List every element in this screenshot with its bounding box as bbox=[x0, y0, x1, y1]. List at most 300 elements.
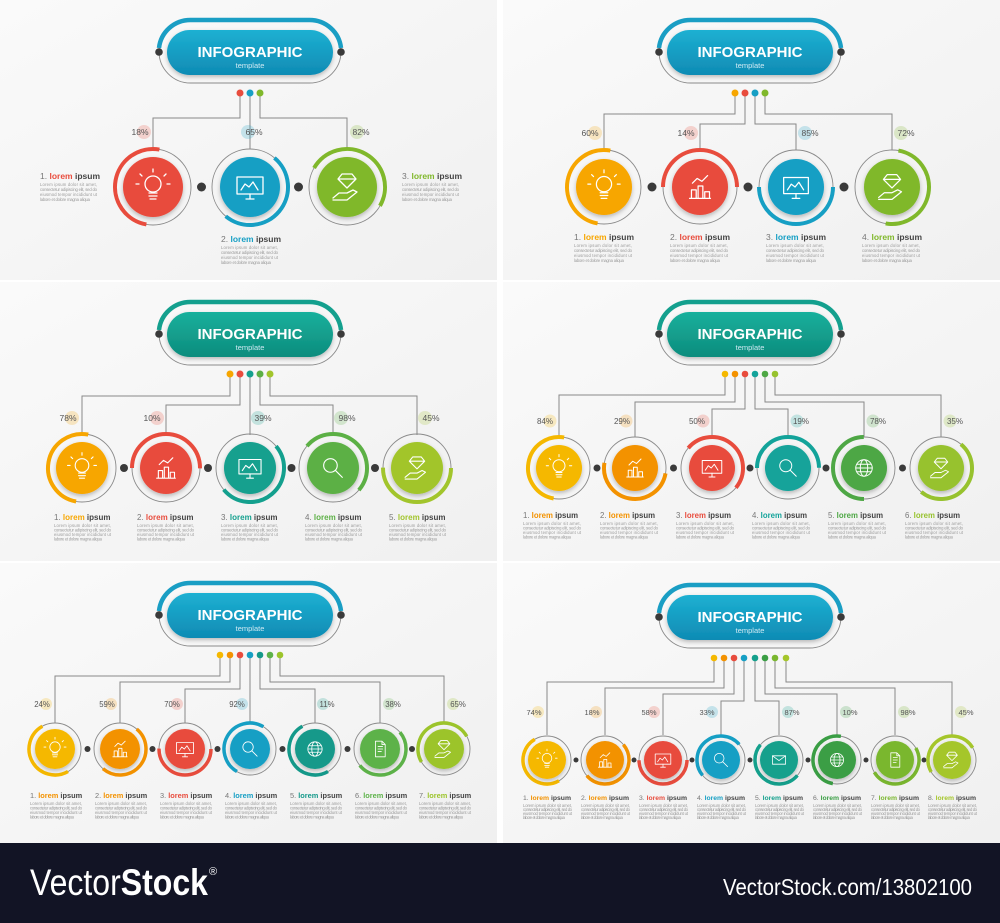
step 4 bbox=[214, 698, 286, 820]
percent: 65% bbox=[245, 127, 263, 137]
label bbox=[290, 791, 343, 820]
percent: 29% bbox=[614, 417, 630, 426]
label: 6. lorem ipsum bbox=[905, 511, 960, 520]
icon: diamond bbox=[879, 175, 902, 199]
label: Lorem ipsum dolor sit amet, bbox=[54, 523, 111, 528]
label: consectetur adipiscing elit, sed do bbox=[30, 806, 83, 810]
icon: monitor bbox=[177, 742, 193, 757]
step 2 bbox=[196, 125, 304, 265]
label: labore et dolore magna aliqua bbox=[30, 814, 75, 820]
step 3 bbox=[202, 411, 298, 542]
label: labore et dolore magna aliqua bbox=[221, 260, 272, 265]
label: eiusmod tempor incididunt ut bbox=[871, 811, 921, 816]
label: labore et dolore magna aliqua bbox=[670, 258, 721, 263]
footer bar bbox=[0, 843, 1000, 923]
label: consectetur adipiscing elit, sed do bbox=[752, 526, 811, 530]
percent: 50% bbox=[689, 417, 705, 426]
step 3 bbox=[668, 414, 756, 540]
percent: 38% bbox=[385, 700, 401, 709]
label: eiusmod tempor incididunt ut bbox=[639, 811, 689, 816]
icon: monitor bbox=[702, 460, 722, 477]
label: 3. lorem ipsum bbox=[766, 232, 826, 242]
icon: magnifier bbox=[243, 742, 257, 756]
icon: monitor bbox=[784, 178, 808, 198]
label bbox=[355, 791, 408, 820]
label: Lorem ipsum dolor sit amet, bbox=[290, 801, 342, 806]
label: eiusmod tempor incididunt ut bbox=[160, 810, 213, 815]
label: eiusmod tempor incididunt ut bbox=[419, 810, 472, 815]
label: labore et dolore magna aliqua bbox=[755, 815, 798, 820]
percent: 98% bbox=[900, 708, 916, 717]
label bbox=[389, 513, 447, 542]
label: labore et dolore magna aliqua bbox=[574, 258, 625, 263]
label: labore et dolore magna aliqua bbox=[389, 536, 438, 542]
label: consectetur adipiscing elit, sed do bbox=[355, 806, 408, 810]
percent: 10% bbox=[842, 708, 858, 717]
icon: globe bbox=[856, 460, 872, 476]
label: Lorem ipsum dolor sit amet, bbox=[40, 182, 97, 187]
header: INFOGRAPHIC bbox=[198, 44, 303, 61]
label: labore et dolore magna aliqua bbox=[290, 814, 335, 820]
step 3 bbox=[639, 706, 689, 820]
label: Lorem ipsum dolor sit amet, bbox=[766, 243, 824, 248]
label: Lorem ipsum dolor sit amet, bbox=[755, 803, 804, 808]
label bbox=[639, 795, 689, 820]
label: Lorem ipsum dolor sit amet, bbox=[160, 801, 212, 806]
label: labore et dolore magna aliqua bbox=[766, 258, 817, 263]
label: eiusmod tempor incididunt ut bbox=[697, 811, 747, 816]
label: Lorem ipsum dolor sit amet, bbox=[523, 803, 572, 808]
label: eiusmod tempor incididunt ut bbox=[290, 810, 343, 815]
label: Lorem ipsum dolor sit amet, bbox=[419, 801, 471, 806]
label: labore et dolore magna aliqua bbox=[697, 815, 740, 820]
step 4 bbox=[849, 126, 935, 263]
label: labore et dolore magna aliqua bbox=[40, 197, 91, 202]
label: eiusmod tempor incididunt ut bbox=[30, 810, 83, 815]
step 3 bbox=[159, 698, 213, 820]
label: eiusmod tempor incididunt ut bbox=[402, 192, 460, 197]
label: eiusmod tempor incididunt ut bbox=[828, 530, 887, 535]
icon: monitor bbox=[239, 460, 261, 478]
step 4 bbox=[752, 414, 819, 540]
panel: 3 steps bbox=[0, 0, 497, 280]
icon: magnifier bbox=[324, 459, 342, 477]
label: eiusmod tempor incididunt ut bbox=[752, 530, 811, 535]
label: eiusmod tempor incididunt ut bbox=[766, 253, 825, 258]
header: template bbox=[236, 343, 264, 352]
label: consectetur adipiscing elit, sed do bbox=[766, 248, 825, 253]
connectors bbox=[82, 370, 417, 472]
percent: 70% bbox=[164, 700, 180, 709]
step 2 bbox=[599, 414, 671, 540]
label bbox=[697, 795, 747, 820]
label: labore et dolore magna aliqua bbox=[523, 534, 572, 540]
header: INFOGRAPHIC bbox=[698, 44, 803, 61]
label bbox=[600, 511, 659, 540]
step 1 bbox=[43, 411, 121, 542]
label: eiusmod tempor incididunt ut bbox=[523, 811, 573, 816]
label: 4. lorem ipsum bbox=[305, 513, 361, 522]
icon: bulb bbox=[68, 453, 96, 478]
percent: 60% bbox=[581, 128, 599, 138]
label: 4. lorem ipsum bbox=[225, 791, 278, 800]
connectors bbox=[153, 90, 347, 192]
label bbox=[30, 791, 83, 820]
label: Lorem ipsum dolor sit amet, bbox=[862, 243, 920, 248]
percent: 82% bbox=[352, 127, 370, 137]
icon: chart bbox=[598, 753, 612, 767]
label: labore et dolore magna aliqua bbox=[928, 815, 971, 820]
header bbox=[655, 302, 845, 365]
label: consectetur adipiscing elit, sed do bbox=[523, 807, 573, 812]
label: 7. lorem ipsum bbox=[419, 791, 472, 800]
percent: 98% bbox=[338, 413, 356, 423]
label: eiusmod tempor incididunt ut bbox=[670, 253, 729, 258]
label: eiusmod tempor incididunt ut bbox=[225, 810, 278, 815]
label bbox=[871, 795, 921, 820]
percent bbox=[131, 125, 151, 139]
percent: 10% bbox=[143, 413, 161, 423]
label: eiusmod tempor incididunt ut bbox=[40, 192, 98, 197]
label: Lorem ipsum dolor sit amet, bbox=[221, 245, 278, 250]
header: template bbox=[236, 61, 264, 70]
label: labore et dolore magna aliqua bbox=[871, 815, 914, 820]
step 1 bbox=[523, 414, 595, 540]
step 2 bbox=[663, 126, 737, 263]
label: 7. lorem ipsum bbox=[871, 795, 919, 802]
icon: magnifier bbox=[780, 460, 796, 476]
label: 3. lorem ipsum bbox=[160, 791, 213, 800]
label: eiusmod tempor incididunt ut bbox=[523, 530, 582, 535]
label: 3. lorem ipsum bbox=[676, 511, 731, 520]
label: labore et dolore magna aliqua bbox=[752, 534, 801, 540]
header: INFOGRAPHIC bbox=[198, 326, 303, 343]
connectors bbox=[55, 652, 444, 752]
label: 2. lorem ipsum bbox=[581, 795, 629, 802]
label: eiusmod tempor incididunt ut bbox=[676, 530, 735, 535]
percent: 78% bbox=[59, 413, 77, 423]
percent: 18% bbox=[131, 127, 149, 137]
label: consectetur adipiscing elit, sed do bbox=[221, 250, 279, 255]
percent: 58% bbox=[641, 708, 657, 717]
label: eiusmod tempor incididunt ut bbox=[755, 811, 805, 816]
header bbox=[655, 585, 845, 648]
step 1 bbox=[19, 698, 91, 820]
icon: chart bbox=[157, 458, 175, 478]
label: consectetur adipiscing elit, sed do bbox=[54, 528, 112, 532]
step 5 bbox=[828, 414, 895, 540]
label: labore et dolore magna aliqua bbox=[137, 536, 186, 542]
label: 2. lorem ipsum bbox=[670, 232, 730, 242]
label bbox=[419, 791, 472, 820]
label: Lorem ipsum dolor sit amet, bbox=[225, 801, 277, 806]
percent: 19% bbox=[793, 417, 809, 426]
label: 4. lorem ipsum bbox=[862, 232, 922, 242]
icon: bulb bbox=[588, 170, 620, 198]
label: labore et dolore magna aliqua bbox=[160, 814, 205, 820]
header: INFOGRAPHIC bbox=[198, 607, 303, 624]
step 1 bbox=[561, 126, 647, 263]
label: 2. lorem ipsum bbox=[600, 511, 655, 520]
label: 5. lorem ipsum bbox=[290, 791, 343, 800]
label: Lorem ipsum dolor sit amet, bbox=[581, 803, 630, 808]
label: consectetur adipiscing elit, sed do bbox=[389, 528, 447, 532]
header bbox=[155, 302, 345, 365]
label: 1. lorem ipsum bbox=[30, 791, 83, 800]
step 3 bbox=[759, 126, 833, 263]
icon: document bbox=[891, 753, 900, 767]
step 6 bbox=[897, 414, 985, 540]
label: consectetur adipiscing elit, sed do bbox=[95, 806, 148, 810]
label: Lorem ipsum dolor sit amet, bbox=[523, 521, 581, 526]
label: Lorem ipsum dolor sit amet, bbox=[752, 521, 810, 526]
label bbox=[137, 513, 195, 542]
label bbox=[928, 795, 978, 820]
icon: mail bbox=[772, 756, 786, 764]
label: eiusmod tempor incididunt ut bbox=[95, 810, 148, 815]
percent: 45% bbox=[422, 413, 440, 423]
label: 6. lorem ipsum bbox=[813, 795, 861, 802]
label: consectetur adipiscing elit, sed do bbox=[137, 528, 195, 532]
label: consectetur adipiscing elit, sed do bbox=[402, 187, 460, 192]
panel: 5 steps bbox=[0, 282, 497, 561]
panel: 7 steps bbox=[0, 563, 497, 843]
label: labore et dolore magna aliqua bbox=[639, 815, 682, 820]
percent: 33% bbox=[699, 708, 715, 717]
label: eiusmod tempor incididunt ut bbox=[305, 532, 363, 537]
label: Lorem ipsum dolor sit amet, bbox=[389, 523, 446, 528]
step 3 bbox=[295, 125, 462, 239]
percent: 65% bbox=[450, 700, 466, 709]
label: labore et dolore magna aliqua bbox=[419, 814, 464, 820]
icon: bulb bbox=[546, 454, 572, 477]
label: labore et dolore magna aliqua bbox=[581, 815, 624, 820]
label: eiusmod tempor incididunt ut bbox=[221, 255, 279, 260]
header: INFOGRAPHIC bbox=[698, 609, 803, 626]
label: Lorem ipsum dolor sit amet, bbox=[639, 803, 688, 808]
icon: diamond bbox=[944, 752, 958, 768]
logo text: VectorStock bbox=[30, 862, 208, 903]
label bbox=[574, 232, 634, 263]
label: eiusmod tempor incididunt ut bbox=[928, 811, 978, 816]
label: 5. lorem ipsum bbox=[828, 511, 883, 520]
label: Lorem ipsum dolor sit amet, bbox=[305, 523, 362, 528]
percent: 87% bbox=[784, 708, 800, 717]
label: Lorem ipsum dolor sit amet, bbox=[697, 803, 746, 808]
label bbox=[676, 511, 735, 540]
percent: 92% bbox=[229, 700, 245, 709]
label: labore et dolore magna aliqua bbox=[355, 814, 400, 820]
label: 4. lorem ipsum bbox=[752, 511, 807, 520]
icon: chart bbox=[627, 459, 643, 477]
label: consectetur adipiscing elit, sed do bbox=[905, 526, 964, 530]
label: 2. lorem ipsum bbox=[95, 791, 148, 800]
label: consectetur adipiscing elit, sed do bbox=[755, 807, 805, 812]
label: eiusmod tempor incididunt ut bbox=[581, 811, 631, 816]
label: labore et dolore magna aliqua bbox=[813, 815, 856, 820]
label bbox=[670, 232, 730, 263]
header: template bbox=[736, 343, 764, 352]
label: Lorem ipsum dolor sit amet, bbox=[402, 182, 459, 187]
percent: 85% bbox=[801, 128, 819, 138]
step 2 bbox=[571, 706, 639, 820]
icon: diamond bbox=[435, 741, 450, 757]
label bbox=[221, 234, 281, 265]
step 8 bbox=[919, 706, 985, 820]
header bbox=[655, 20, 845, 83]
label: 5. lorem ipsum bbox=[755, 795, 803, 802]
label: labore et dolore magna aliqua bbox=[828, 534, 877, 540]
label: consectetur adipiscing elit, sed do bbox=[290, 806, 343, 810]
label: eiusmod tempor incididunt ut bbox=[600, 530, 659, 535]
label bbox=[862, 232, 922, 263]
icon: diamond bbox=[930, 458, 948, 478]
label: labore et dolore magna aliqua bbox=[305, 536, 354, 542]
label: Lorem ipsum dolor sit amet, bbox=[95, 801, 147, 806]
icon: bulb bbox=[136, 169, 170, 199]
icon: monitor bbox=[655, 754, 671, 767]
connectors bbox=[547, 655, 952, 762]
label: 5. lorem ipsum bbox=[389, 513, 445, 522]
label: labore et dolore magna aliqua bbox=[402, 197, 453, 202]
label: consectetur adipiscing elit, sed do bbox=[670, 248, 729, 253]
step 2 bbox=[132, 411, 200, 542]
label: eiusmod tempor incididunt ut bbox=[355, 810, 408, 815]
step 1 bbox=[40, 125, 197, 231]
label: consectetur adipiscing elit, sed do bbox=[523, 526, 582, 530]
label: Lorem ipsum dolor sit amet, bbox=[813, 803, 862, 808]
header bbox=[155, 20, 345, 83]
label: 1. lorem ipsum bbox=[523, 511, 578, 520]
label: labore et dolore magna aliqua bbox=[221, 536, 270, 542]
label: Lorem ipsum dolor sit amet, bbox=[600, 521, 658, 526]
icon: chart bbox=[113, 741, 127, 757]
label: labore et dolore magna aliqua bbox=[225, 814, 270, 820]
connectors bbox=[604, 90, 892, 192]
label: eiusmod tempor incididunt ut bbox=[862, 253, 921, 258]
step 5 bbox=[383, 411, 451, 542]
label: Lorem ipsum dolor sit amet, bbox=[928, 803, 977, 808]
label: Lorem ipsum dolor sit amet, bbox=[221, 523, 278, 528]
label bbox=[221, 513, 279, 542]
label: Lorem ipsum dolor sit amet, bbox=[137, 523, 194, 528]
label: Lorem ipsum dolor sit amet, bbox=[30, 801, 82, 806]
label: eiusmod tempor incididunt ut bbox=[813, 811, 863, 816]
step 6 bbox=[343, 698, 417, 820]
connectors bbox=[559, 371, 941, 472]
label: Lorem ipsum dolor sit amet, bbox=[871, 803, 920, 808]
label bbox=[766, 232, 826, 263]
label: consectetur adipiscing elit, sed do bbox=[828, 526, 887, 530]
label: 8. lorem ipsum bbox=[928, 795, 976, 802]
label: eiusmod tempor incididunt ut bbox=[54, 532, 112, 537]
icon: diamond bbox=[333, 174, 357, 200]
label: consectetur adipiscing elit, sed do bbox=[225, 806, 278, 810]
label: labore et dolore magna aliqua bbox=[54, 536, 103, 542]
label: Lorem ipsum dolor sit amet, bbox=[355, 801, 407, 806]
label: consectetur adipiscing elit, sed do bbox=[639, 807, 689, 812]
label: consectetur adipiscing elit, sed do bbox=[697, 807, 747, 812]
label: eiusmod tempor incididunt ut bbox=[221, 532, 279, 537]
panel: 6 steps bbox=[503, 282, 1000, 561]
label: 1. lorem ipsum bbox=[523, 795, 571, 802]
label: consectetur adipiscing elit, sed do bbox=[928, 807, 978, 812]
step 4 bbox=[687, 706, 755, 820]
step 4 bbox=[285, 411, 381, 542]
label: labore et dolore magna aliqua bbox=[523, 815, 566, 820]
percent: 45% bbox=[958, 708, 974, 717]
label: Lorem ipsum dolor sit amet, bbox=[828, 521, 886, 526]
step 1 bbox=[514, 706, 580, 820]
step 5 bbox=[745, 706, 813, 820]
label bbox=[40, 171, 100, 202]
label: 3. lorem ipsum bbox=[221, 513, 277, 522]
icon: document bbox=[375, 741, 385, 757]
icon: globe bbox=[830, 753, 844, 767]
label: 1. lorem ipsum bbox=[54, 513, 110, 522]
percent: 39% bbox=[254, 413, 272, 423]
label: consectetur adipiscing elit, sed do bbox=[419, 806, 472, 810]
label: consectetur adipiscing elit, sed do bbox=[581, 807, 631, 812]
label bbox=[828, 511, 887, 540]
label: eiusmod tempor incididunt ut bbox=[137, 532, 195, 537]
label: 2. lorem ipsum bbox=[221, 234, 281, 244]
icon: diamond bbox=[405, 457, 426, 479]
label bbox=[755, 795, 805, 820]
panel: 8 steps bbox=[503, 563, 1000, 843]
label: 1. lorem ipsum bbox=[574, 232, 634, 242]
percent: 74% bbox=[526, 708, 542, 717]
label bbox=[160, 791, 213, 820]
label: eiusmod tempor incididunt ut bbox=[905, 530, 964, 535]
label bbox=[905, 511, 964, 540]
step 7 bbox=[408, 698, 480, 820]
percent: 78% bbox=[870, 417, 886, 426]
percent: 11% bbox=[319, 700, 335, 709]
step 7 bbox=[862, 706, 928, 820]
icon: globe bbox=[308, 742, 322, 756]
url text: VectorStock.com/13802100 bbox=[723, 874, 972, 900]
percent bbox=[350, 125, 370, 139]
label: consectetur adipiscing elit, sed do bbox=[160, 806, 213, 810]
icon: bulb bbox=[44, 737, 66, 757]
step 6 bbox=[809, 706, 865, 820]
percent: 72% bbox=[897, 128, 915, 138]
label: consectetur adipiscing elit, sed do bbox=[305, 528, 363, 532]
header: template bbox=[236, 624, 264, 633]
step 2 bbox=[83, 698, 157, 820]
label: Lorem ipsum dolor sit amet, bbox=[574, 243, 632, 248]
label: consectetur adipiscing elit, sed do bbox=[221, 528, 279, 532]
label bbox=[402, 171, 462, 202]
label bbox=[523, 795, 573, 820]
label: labore et dolore magna aliqua bbox=[676, 534, 725, 540]
percent: 35% bbox=[947, 417, 963, 426]
label: eiusmod tempor incididunt ut bbox=[574, 253, 633, 258]
label: 4. lorem ipsum bbox=[697, 795, 745, 802]
icon: monitor bbox=[237, 177, 263, 199]
label bbox=[752, 511, 811, 540]
percent: 24% bbox=[34, 700, 50, 709]
label: consectetur adipiscing elit, sed do bbox=[871, 807, 921, 812]
label: consectetur adipiscing elit, sed do bbox=[574, 248, 633, 253]
label: labore et dolore magna aliqua bbox=[862, 258, 913, 263]
label: 3. lorem ipsum bbox=[639, 795, 687, 802]
header: template bbox=[736, 626, 764, 635]
percent: 59% bbox=[99, 700, 115, 709]
label: 1. lorem ipsum bbox=[40, 171, 100, 181]
label bbox=[305, 513, 363, 542]
